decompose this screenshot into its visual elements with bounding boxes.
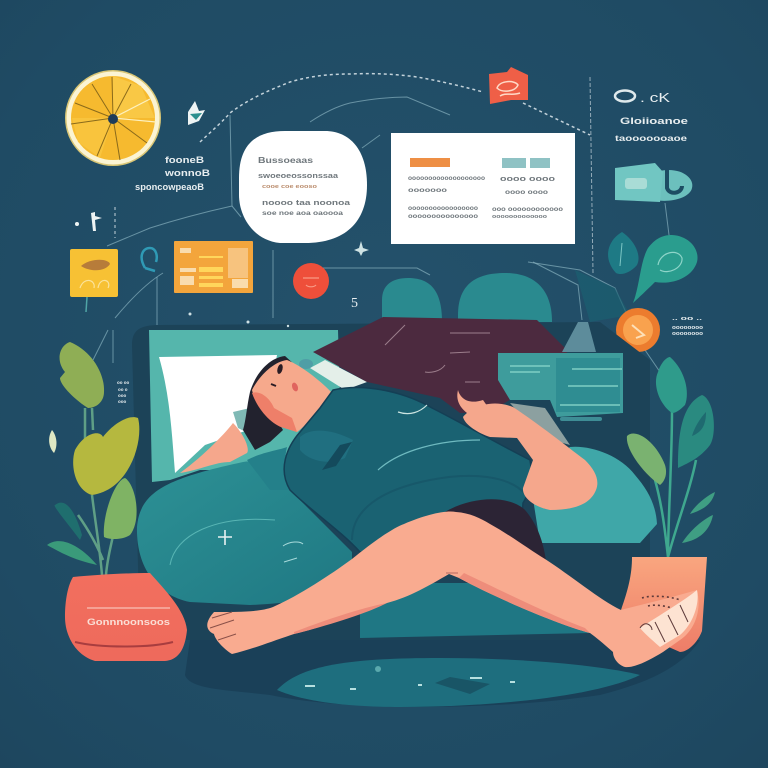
speckles — [642, 596, 680, 608]
character — [180, 356, 699, 667]
icon: green speech leaf — [633, 235, 698, 303]
floor puddle — [277, 658, 640, 707]
icon: bottle on the shelf — [562, 322, 596, 352]
teal cap behind head — [233, 408, 262, 433]
foot sole fan — [640, 590, 698, 647]
face — [252, 360, 332, 432]
hair — [243, 356, 295, 450]
panel: white card: ooooooooooooo — [492, 214, 548, 220]
icon: orange circle — [616, 308, 660, 352]
legs — [207, 512, 699, 667]
teal pillow small — [382, 278, 442, 322]
light pillow behind neck — [310, 360, 367, 390]
icon: small star ornament — [188, 101, 205, 125]
text block: small right note: oooooooo — [672, 325, 704, 331]
text block: right caption — [615, 90, 688, 143]
panel: white card: oooo oooo — [500, 176, 555, 183]
text block: small right note: oooooooo — [672, 331, 703, 337]
shorts — [440, 499, 547, 570]
text block: small right note — [672, 316, 704, 337]
icon: teal card with handle — [615, 163, 692, 202]
panel: speech bubble: swoeoeossonssaa — [258, 173, 338, 180]
panel: speech bubble: cooe coe eooso — [262, 184, 318, 190]
panel: yellow card — [70, 249, 118, 312]
teal monitor panel — [498, 353, 623, 421]
plant: left — [47, 342, 139, 575]
left arm behind pillow — [180, 423, 248, 473]
text block: left caption: sponcowpeaoB — [135, 182, 205, 192]
text block: right caption: taooooooaoe — [615, 133, 687, 143]
text block: right caption: Gloiioanoe — [620, 116, 688, 126]
pot: right — [621, 557, 707, 652]
icon: red badge — [489, 67, 528, 104]
mattress right side — [530, 447, 657, 543]
text block: tiny note by the plant: oo oo — [117, 380, 129, 385]
panel: speech bubble: noooo taa noonoa — [262, 200, 350, 207]
white pillow — [159, 355, 277, 473]
text block: left caption: wonnoB — [164, 168, 211, 178]
text block: tiny note by the plant: ooo — [118, 399, 126, 404]
floor shadow — [185, 640, 700, 707]
icon: small sparkle: 5 — [351, 296, 358, 311]
panel: speech bubble: Bussoeaas — [258, 156, 314, 165]
pot: left with label — [65, 573, 187, 661]
text block: tiny note by the plant — [117, 380, 129, 404]
icon: small sparkle — [351, 241, 369, 311]
pot: left with label: Gonnnoonsoos — [87, 617, 170, 627]
panel: speech bubble: soe noe aoa oaoooa — [262, 211, 344, 217]
panel: orange card — [174, 241, 253, 293]
small dots above bed — [188, 312, 289, 327]
torso shirt — [284, 388, 531, 552]
plant: right — [627, 357, 715, 557]
blanket left — [137, 461, 352, 605]
wedge beam to orange circle — [575, 270, 630, 322]
toes — [210, 612, 236, 640]
raised arm — [463, 403, 597, 510]
panel: white card — [391, 133, 575, 244]
teal blob by head — [299, 359, 313, 369]
dark maroon pillow — [313, 317, 567, 413]
panel: speech bubble — [239, 131, 367, 243]
panel: white card: ooooooo — [408, 188, 448, 194]
hand finger — [457, 390, 490, 415]
text block: right caption: . cK — [640, 90, 670, 105]
text block: left caption — [135, 155, 211, 192]
icon: red circle — [293, 263, 329, 299]
connector lines — [93, 74, 670, 372]
icon: teal leaf — [608, 232, 639, 274]
panel: white card: ooo oooooooooooo — [492, 206, 563, 213]
panel: white card: ooooooooooooooo — [408, 214, 478, 220]
panel: white card: oooo oooo — [505, 190, 548, 196]
text block: tiny note by the plant: oo o — [118, 387, 128, 392]
text block: tiny note by the plant: ooo — [118, 393, 126, 398]
panel: white card: ooooooooooooooooooo — [408, 176, 485, 182]
dark surround behind bed — [132, 322, 650, 640]
sleeve on shoulder — [247, 447, 290, 490]
teal pillow large — [458, 273, 552, 322]
mattress base — [360, 583, 590, 638]
leg shading — [459, 573, 590, 633]
gray sleeve — [510, 403, 570, 445]
text block: small right note: .. oo .. — [672, 316, 703, 322]
panel: white card: ooooooooooooooooo — [408, 206, 478, 212]
icon: small figure — [75, 212, 102, 231]
icon: lemon slice — [65, 70, 161, 166]
bed headboard — [149, 330, 340, 482]
icon: headset hook — [142, 248, 157, 271]
text block: left caption: fooneB — [165, 155, 205, 165]
